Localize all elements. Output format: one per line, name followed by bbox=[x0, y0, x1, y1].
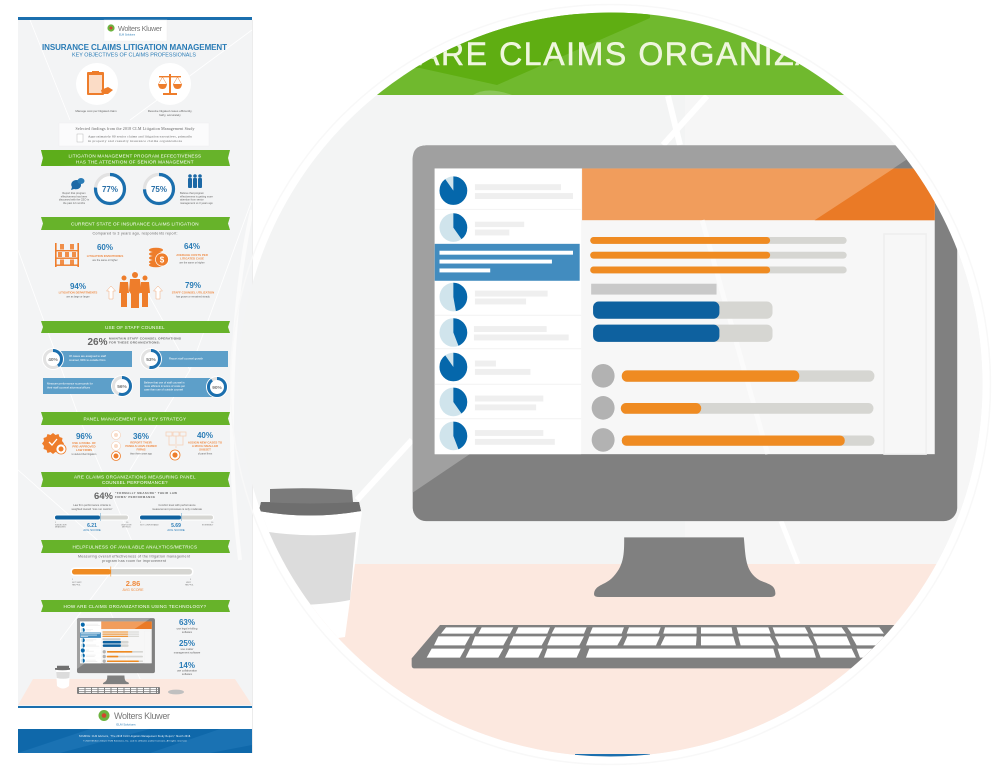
banner: use of staff counsel bbox=[41, 321, 230, 333]
callout: 56% benchmarks: their staff counsel attorneys/offices bbox=[47, 386, 91, 390]
magnified coffee cup bbox=[260, 488, 362, 638]
stat: average costs bbox=[149, 242, 209, 267]
banner: technology: HOW ARE CLAIMS ORGANIZATIONS USING TECHNOLOGY? bbox=[64, 604, 206, 609]
logo header: Wolters Kluwer bbox=[118, 24, 163, 33]
stat list: technology use: 63% bbox=[179, 618, 195, 627]
findings box: Approximately 80 senior claims and litigation executives, primarily bbox=[88, 134, 192, 140]
stat list: technology use: 14% bbox=[179, 661, 195, 670]
objective: manage cost bbox=[75, 63, 118, 113]
footer logo bbox=[18, 706, 252, 729]
stat: litigation inventories bbox=[55, 243, 123, 267]
stat: litigation departments: are as large or larger bbox=[66, 296, 90, 298]
magnified banner: ARE CLAIMS ORGANIZATIONS bbox=[418, 36, 922, 72]
stat: 36% fewer firms: than three years ago bbox=[130, 452, 153, 456]
stat: staff counsel utilization: has grown or remained steady bbox=[176, 296, 211, 298]
objective: manage cost: Manage cost per litigated claim bbox=[75, 109, 117, 113]
stat: 36% fewer firms: PANELS HAVE FEWER bbox=[125, 444, 158, 448]
title: INSURANCE CLAIMS LITIGATION MANAGEMENT bbox=[42, 43, 227, 52]
footer source bbox=[18, 729, 252, 753]
chart: comfort level score: 5.69 bbox=[171, 523, 181, 529]
chart: comfort level score: 10 bbox=[211, 522, 214, 524]
title bbox=[42, 43, 227, 58]
stat: 40% assign new cases: 40% bbox=[197, 431, 213, 440]
banner: technology bbox=[41, 600, 230, 612]
chart: comfort level score: 1 bbox=[140, 522, 142, 524]
stat: 64% formally measure: 64% bbox=[94, 491, 114, 502]
stat list: technology use: use legal e-billing bbox=[177, 626, 198, 630]
stat: 36% fewer firms: FIRMS bbox=[136, 448, 146, 452]
findings box: in property and casualty insurance claims organizations bbox=[88, 139, 183, 143]
chart: analytics helpfulness score: NOT VERY bbox=[72, 582, 82, 584]
callout: 40% of cases: Of cases are assigned to staff bbox=[69, 354, 106, 358]
stat list: technology use: software bbox=[182, 630, 193, 634]
stat: 77% donut: Report that program bbox=[62, 191, 86, 195]
stat: 26% staff counsel bbox=[87, 336, 181, 348]
chart: law firm criteria score bbox=[54, 503, 132, 532]
desk scene bbox=[18, 618, 252, 705]
chart: comfort level score: AVG SCORE bbox=[167, 528, 185, 532]
stat: 96% panel: USE A PANEL OF bbox=[72, 441, 96, 445]
text: compared to 3 years ago: Compared to 3 years ago, respondents report: bbox=[92, 232, 178, 236]
stat: 36% fewer firms: 36% bbox=[133, 432, 149, 441]
stat: average costs: LITIGATED CASE bbox=[180, 256, 204, 260]
stat: 96% panel: LAW FIRMS bbox=[76, 448, 92, 452]
stat list: technology use: use collaboration bbox=[177, 668, 198, 672]
stat: litigation departments: 94% bbox=[70, 282, 86, 291]
stat: 77% donut: effectiveness has been bbox=[61, 194, 88, 198]
callout: 56% benchmarks: Measure performance scorecards for bbox=[47, 382, 93, 386]
stat: 75% donut: 75% bbox=[151, 185, 167, 194]
stat: 77% donut: discussed with the CEO in bbox=[59, 198, 90, 202]
panel: infographic thumbnail bbox=[18, 17, 253, 753]
stat: 26% staff counsel: FOR THESE ORGANIZATIONS: bbox=[109, 340, 160, 344]
stat: litigation inventories: are the same or higher bbox=[92, 259, 118, 262]
footer logo: ELM Solutions bbox=[116, 722, 136, 726]
stat: staff counsel utilization: STAFF COUNSEL UTILIZATION bbox=[172, 290, 214, 294]
callout: 56% benchmarks bbox=[43, 375, 133, 397]
icon: people with arrows bbox=[106, 272, 162, 308]
chart: analytics helpfulness score bbox=[70, 566, 194, 592]
stat: staff counsel utilization: 79% bbox=[185, 281, 201, 290]
stat: 77% donut: 77% bbox=[102, 185, 118, 194]
stat list: technology use: software bbox=[182, 672, 193, 676]
chart: law firm criteria score: METRICS bbox=[122, 526, 131, 528]
banner: helpfulness bbox=[41, 540, 230, 553]
stat: 64% formally measure: “FORMALLY MEASURE” THEIR LAW bbox=[115, 491, 177, 495]
magnified banner bbox=[377, 12, 844, 95]
banner: panel management bbox=[41, 412, 230, 425]
callout: 53% growth bbox=[140, 348, 228, 370]
chart: law firm criteria score: Law firm performance criteria is bbox=[73, 503, 111, 507]
text: measuring overall effectiveness bbox=[78, 554, 190, 563]
banner: measuring panel counsel: COUNSEL PERFORMANCE? bbox=[102, 480, 168, 485]
logo header: ELM Solutions bbox=[119, 33, 136, 36]
chart: analytics helpfulness score: HELPFUL bbox=[72, 584, 81, 586]
top blue bar bbox=[18, 17, 252, 20]
stat: 96% panel: to defend their litigation bbox=[72, 453, 97, 456]
objective: resolve cases bbox=[148, 63, 192, 117]
stat list: technology use: 25% bbox=[179, 639, 195, 648]
callout: 90% staff counsel efficiency bbox=[140, 376, 228, 398]
banner: measuring panel counsel bbox=[41, 472, 230, 487]
stat list: technology use: management software bbox=[174, 650, 201, 654]
stat: 40% assign new cases: of panel firms bbox=[198, 452, 213, 456]
chart: analytics helpfulness score: HELPFUL bbox=[185, 584, 194, 586]
banner: current state: CURRENT STATE OF INSURANCE CLAIMS LITIGATION bbox=[71, 222, 199, 226]
footer source: © 2018 Wolters Kluwer ELM Solutions, Inc. and its affiliates and/or licensors. All rights reserved. bbox=[83, 740, 187, 742]
stat: 75% donut: management vs 3 years ago bbox=[180, 201, 213, 205]
chart: law firm criteria score: 6.21 bbox=[87, 523, 97, 529]
banner: program effectiveness: HAS THE ATTENTION OF SENIOR MANAGEMENT bbox=[76, 160, 194, 164]
chart: comfort level score bbox=[139, 503, 214, 532]
stat: litigation departments: LITIGATION DEPARTMENTS bbox=[59, 290, 97, 294]
magnifier outer ring bbox=[230, 4, 990, 764]
banner: panel management: PANEL MANAGEMENT IS A KEY STRATEGY bbox=[84, 416, 186, 422]
text: measuring overall effectiveness: program has room for improvement bbox=[102, 559, 166, 563]
stat: 36% fewer firms bbox=[112, 430, 158, 460]
objective: resolve cases: Resolve litigated cases efficiently, bbox=[148, 109, 192, 113]
callout: 40% of cases: counsel, 60% to outside firms bbox=[69, 358, 106, 362]
stat: average costs: are the same or higher bbox=[179, 262, 205, 264]
chart: comfort level score: EXTREMELY bbox=[202, 524, 214, 526]
chart: comfort level score: measurement processes is only moderate bbox=[152, 507, 202, 511]
callout: 53% growth: Report staff counsel growth bbox=[169, 356, 203, 360]
chart: law firm criteria score: MEASURES bbox=[55, 526, 66, 528]
chart: analytics helpfulness score: 2.86 bbox=[126, 579, 140, 588]
stat: average costs: $ bbox=[160, 256, 165, 264]
chart: analytics helpfulness score: 1 bbox=[72, 579, 74, 581]
stat: 40% assign new cases: ASSIGN NEW CASES TO bbox=[188, 440, 223, 444]
magnified keyboard bbox=[412, 625, 943, 668]
stat: 96% panel: PRE-APPROVED bbox=[72, 444, 96, 448]
chart: law firm criteria score: 10 bbox=[126, 522, 129, 524]
stat: 96% panel: 96% bbox=[76, 432, 92, 441]
banner: helpfulness: HELPFULNESS OF AVAILABLE ANALYTICS/METRICS bbox=[72, 544, 198, 550]
stat: litigation departments bbox=[59, 282, 97, 298]
stat: 40% assign new cases: SUBSET bbox=[199, 448, 211, 452]
objective: resolve cases: fairly, accurately bbox=[159, 113, 181, 117]
stat: 40% assign new cases bbox=[166, 431, 223, 460]
stat: 26% staff counsel: MAINTAIN STAFF COUNSEL OPERATIONS bbox=[109, 336, 181, 340]
stat: litigation inventories: LITIGATION INVENTORIES bbox=[87, 254, 123, 258]
stat list: technology use: use matter bbox=[181, 647, 193, 651]
chart: comfort level score: NOT COMFORTABLE bbox=[140, 524, 159, 526]
footer logo: Wolters Kluwer bbox=[114, 711, 170, 721]
callout: 53% growth: 53% bbox=[146, 357, 157, 363]
stat: 77% donut bbox=[59, 174, 124, 205]
findings box: Selected findings from the 2018 CLM Litigation Management Study bbox=[76, 126, 194, 131]
callout: 40% of cases bbox=[42, 348, 132, 370]
stat: average costs: 64% bbox=[184, 242, 200, 251]
banner: current state bbox=[41, 217, 230, 230]
chart: law firm criteria score: OBJECTIVE bbox=[121, 524, 132, 526]
findings box bbox=[59, 123, 209, 146]
chart: analytics helpfulness score: 5 bbox=[190, 579, 192, 581]
magnified monitor bbox=[413, 145, 957, 597]
callout: 90% staff counsel efficiency: Believe that use of staff counsel is bbox=[144, 380, 185, 384]
stat: 75% donut: Believe that program bbox=[180, 191, 204, 195]
callout: 56% benchmarks: 56% bbox=[117, 384, 128, 390]
chart: analytics helpfulness score: VERY bbox=[186, 582, 192, 584]
banner: use of staff counsel: USE OF STAFF COUNSEL bbox=[105, 325, 165, 330]
stat: staff counsel utilization bbox=[172, 281, 214, 298]
title: KEY OBJECTIVES OF CLAIMS PROFESSIONALS bbox=[72, 52, 196, 58]
stat list: technology use bbox=[174, 618, 201, 676]
chart: law firm criteria score: weighted toward “loss run metrics” bbox=[72, 507, 113, 511]
stat: 75% donut bbox=[144, 174, 213, 205]
chart: comfort level score: Comfort level with performance bbox=[158, 503, 196, 507]
callout: 40% of cases: 40% bbox=[48, 357, 59, 363]
callout: 90% staff counsel efficiency: case than use of outside counsel bbox=[144, 388, 184, 392]
banner: program effectiveness bbox=[41, 150, 230, 166]
stat: 75% donut: effectiveness is getting more bbox=[180, 194, 213, 198]
stat: 64% formally measure bbox=[94, 491, 177, 502]
stat: 75% donut: attention from senior bbox=[180, 198, 204, 202]
stat: 64% formally measure: FIRMS' PERFORMANCE bbox=[115, 495, 155, 499]
callout: 90% staff counsel efficiency: 90% bbox=[212, 385, 223, 391]
chart: law firm criteria score: 1 bbox=[55, 522, 57, 524]
chart: law firm criteria score: SUBJECTIVE bbox=[55, 524, 67, 526]
chart: analytics helpfulness score: AVG SCORE bbox=[122, 588, 144, 592]
footer source: SOURCE: CLM Advisors, “The 2018 CLM Litigation Management Study Report,” March 2018. bbox=[79, 735, 191, 738]
logo header bbox=[104, 20, 167, 41]
stat: 96% panel bbox=[42, 432, 97, 456]
banner: program effectiveness: LITIGATION MANAGEMENT PROGRAM EFFECTIVENESS bbox=[68, 154, 202, 158]
stat: 36% fewer firms: REPORT THEIR bbox=[130, 440, 153, 444]
text: measuring overall effectiveness: Measuring overall effectiveness of the litigation management bbox=[78, 554, 190, 558]
stat: 77% donut: the past 12 months bbox=[63, 201, 86, 205]
panel: magnified circle bbox=[230, 0, 1000, 771]
stat: litigation inventories: 60% bbox=[97, 243, 113, 252]
stat: 26% staff counsel: 26% bbox=[87, 337, 108, 348]
banner: measuring panel counsel: ARE CLAIMS ORGANIZATIONS MEASURING PANEL bbox=[74, 474, 196, 480]
stat: average costs: AVERAGE COSTS PER bbox=[176, 253, 209, 257]
stat: 40% assign new cases: A MUCH SMALLER bbox=[192, 444, 219, 448]
callout: 90% staff counsel efficiency: more efficient in terms of costs per bbox=[144, 384, 185, 388]
chart: law firm criteria score: AVG SCORE bbox=[83, 528, 101, 532]
